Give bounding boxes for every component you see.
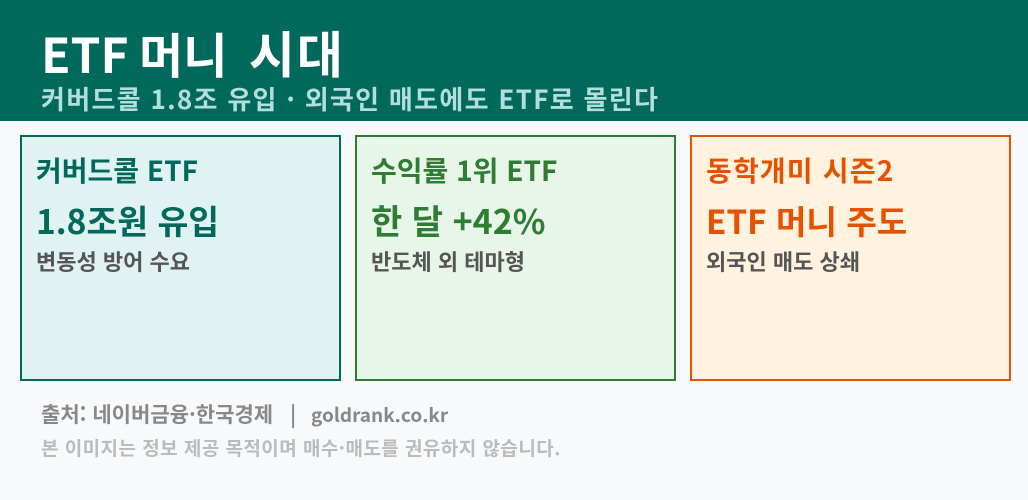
panel value: 한 달 +42% — [371, 195, 546, 244]
panel note: 반도체 외 테마형 — [371, 245, 525, 277]
source line — [41, 399, 448, 429]
panel note: 외국인 매도 상쇄 — [706, 245, 860, 277]
panel value: 1.8조원 유입 — [36, 195, 219, 244]
panel heading: 수익률 1위 ETF — [371, 150, 557, 190]
panel heading: 동학개미 시즌2 — [706, 150, 895, 190]
subtitle: 커버드콜 1.8조 유입 · 외국인 매도에도 ETF로 몰린다 — [41, 80, 659, 117]
panel value: ETF 머니 주도 — [706, 195, 907, 244]
source line: | — [290, 399, 296, 429]
panel: top return ETF — [355, 135, 676, 381]
panel heading: 커버드콜 ETF — [36, 150, 198, 190]
source line: goldrank.co.kr — [311, 401, 448, 428]
panel note: 변동성 방어 수요 — [36, 245, 190, 277]
disclaimer: 본 이미지는 정보 제공 목적이며 매수·매도를 권유하지 않습니다. — [41, 434, 561, 461]
title: ETF 머니 시대 — [41, 16, 345, 88]
header banner — [0, 0, 1028, 121]
panel: covered call ETF — [20, 135, 341, 381]
panel: ants season 2 — [690, 135, 1011, 381]
source line: 출처: 네이버금융·한국경제 — [41, 399, 273, 429]
